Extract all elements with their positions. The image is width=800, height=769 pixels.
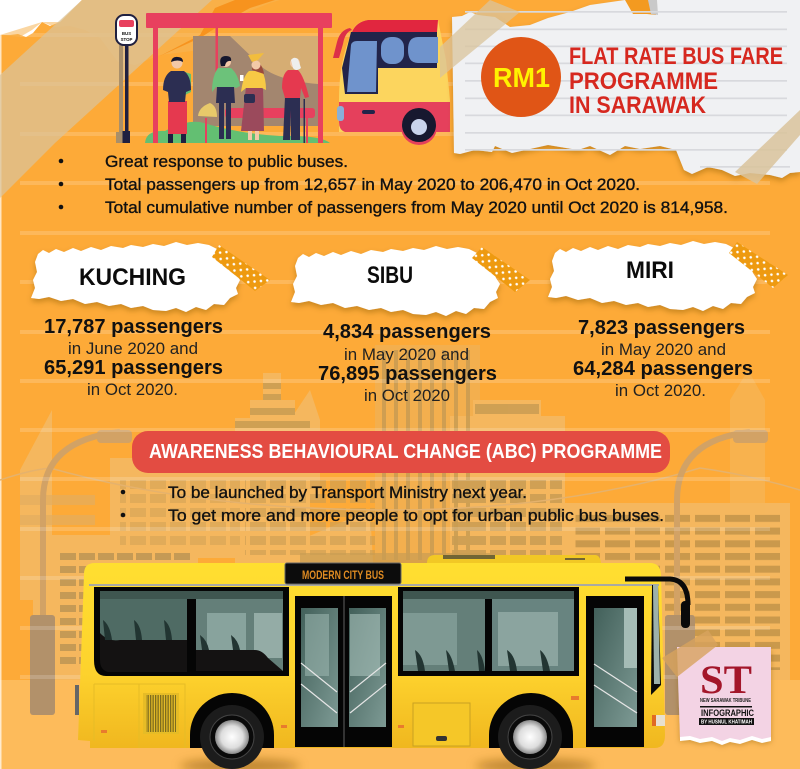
logo note: New Sarawak Tribune: BY HUSNUL KHATIMAH	[701, 720, 752, 726]
panel: Sibu	[291, 246, 530, 405]
person: woman in green	[198, 56, 244, 139]
person: young man	[163, 57, 191, 143]
front windows	[398, 587, 579, 676]
icon: bus stop sign: BUS	[122, 31, 131, 36]
panel: Sibu: 76,895 passengers	[318, 363, 497, 385]
panel: Miri: 64,284 passengers	[573, 358, 753, 380]
horizontal stripes	[20, 33, 770, 679]
panel: Kuching	[31, 242, 270, 399]
title: PROGRAMME	[569, 68, 718, 95]
logo note: New Sarawak Tribune: INFOGRAPHIC	[701, 708, 754, 718]
person: old man with cane	[282, 58, 309, 143]
person: woman with hat	[241, 53, 266, 140]
panel: Sibu: SIBU	[367, 262, 413, 289]
icon: bus stop sign: STOP	[121, 37, 133, 42]
paper note: title panel	[440, 0, 800, 184]
logo note: New Sarawak Tribune: ST	[700, 657, 752, 702]
mirror	[625, 579, 688, 605]
panel: Miri	[548, 241, 788, 400]
summary bullet list: Great response to public buses.	[105, 153, 348, 171]
bus shelter with people	[145, 13, 332, 143]
torn paper and tape top left	[0, 0, 280, 198]
panel: Sibu: in Oct 2020	[364, 387, 450, 405]
panel: Sibu: in May 2020 and	[344, 346, 469, 364]
heading: ABC programme: AWARENESS BEHAVIOURAL CHANGE (ABC) PROGRAMME	[149, 441, 662, 463]
panel: Kuching: 65,291 passengers	[44, 357, 223, 379]
street lamps and cables	[0, 430, 800, 715]
logo note: New Sarawak Tribune: NEW SARAWAK TRIBUNE	[700, 698, 752, 704]
icon: RM1 badge	[481, 37, 561, 117]
icon: red and yellow bus	[333, 20, 450, 145]
icon: RM1 badge: RM1	[493, 62, 550, 93]
panel: Miri: MIRI	[626, 257, 674, 284]
ABC bullet list: To be launched by Transport Ministry next year.	[168, 484, 527, 502]
title: IN SARAWAK	[569, 92, 707, 119]
panel: Miri: in May 2020 and	[601, 341, 726, 359]
yellow city bus	[75, 555, 690, 769]
title	[569, 43, 783, 119]
panel: Sibu: 4,834 passengers	[323, 321, 491, 343]
rear windows	[94, 587, 289, 676]
panel: Kuching: 17,787 passengers	[44, 316, 223, 338]
centre door	[295, 596, 392, 747]
destination display	[285, 563, 401, 584]
wheels	[190, 693, 573, 769]
panel: Kuching: KUCHING	[79, 264, 186, 291]
summary bullet list: Total cumulative number of passengers from May 2020 until Oct 2020 is 814,958.	[105, 199, 728, 217]
icon: bus stop sign	[116, 15, 137, 143]
panel: Kuching: in Oct 2020.	[87, 381, 178, 399]
summary bullet list	[59, 153, 728, 217]
panel: Miri: 7,823 passengers	[578, 317, 745, 339]
destination display: MODERN CITY BUS	[302, 570, 384, 582]
panel: Kuching: in June 2020 and	[68, 340, 198, 358]
logo note: New Sarawak Tribune	[662, 630, 771, 745]
heading: ABC programme	[132, 431, 670, 473]
panel: Miri: in Oct 2020.	[615, 382, 706, 400]
ABC bullet list: To get more and more people to opt for urban public bus buses.	[168, 507, 664, 525]
ABC bullet list	[121, 484, 664, 525]
front door	[586, 596, 644, 747]
summary bullet list: Total passengers up from 12,657 in May 2020 to 206,470 in Oct 2020.	[105, 176, 640, 194]
